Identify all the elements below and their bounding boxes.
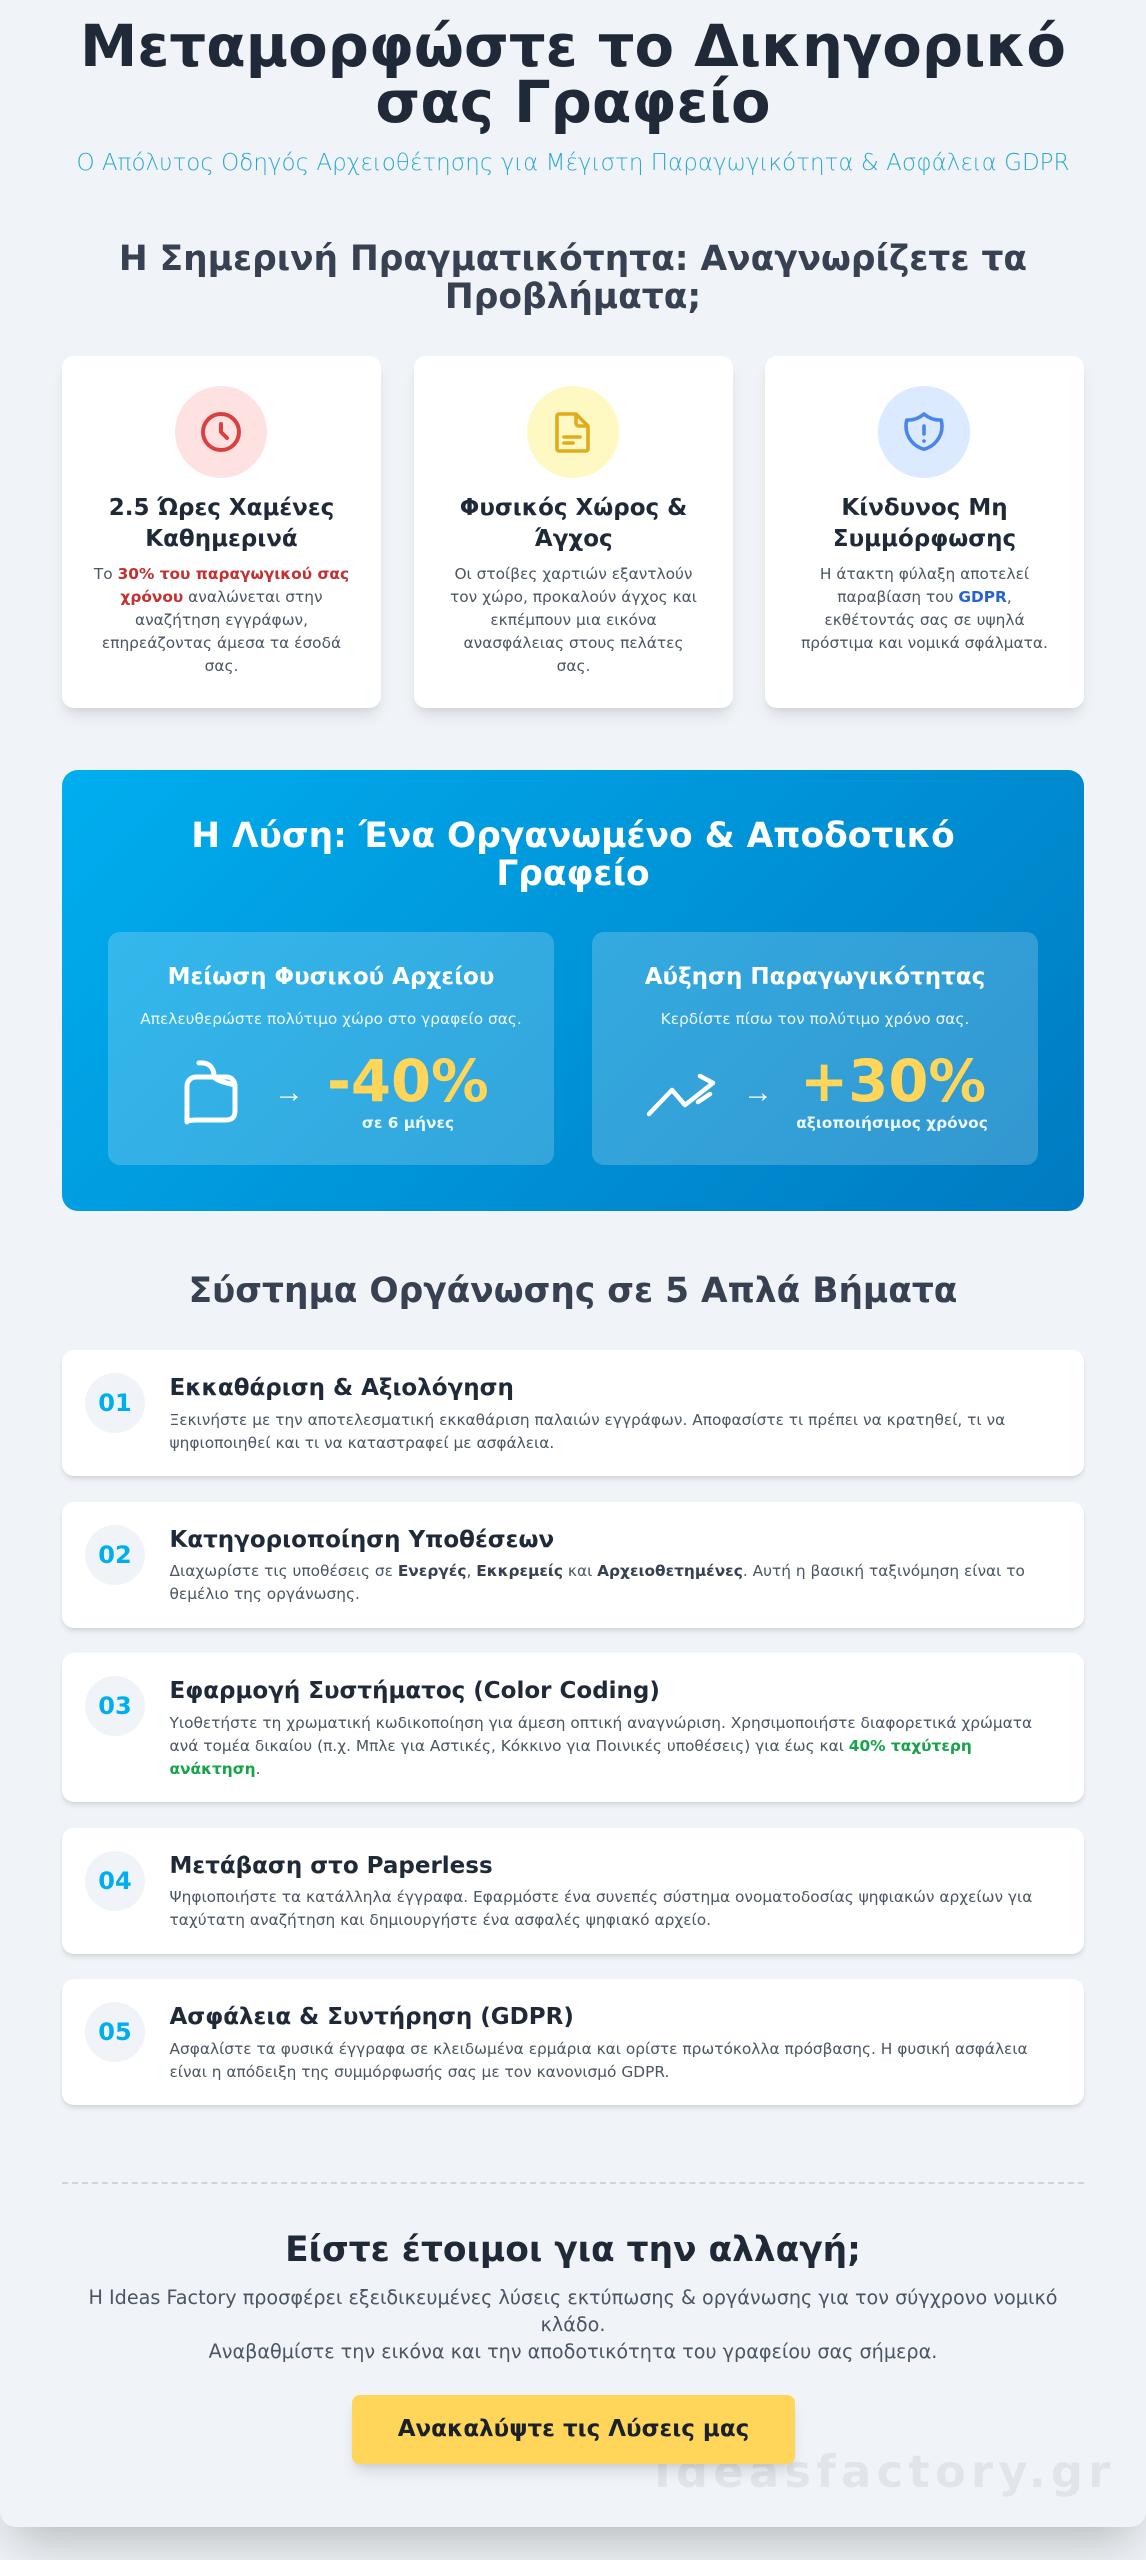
card title: Καθημερινά: [145, 526, 298, 552]
step 5: [62, 1979, 1084, 2105]
card text: σας.: [557, 657, 590, 675]
step number: [85, 1373, 145, 1433]
card text: Το 30% του παραγωγικού σας: [94, 565, 349, 583]
panel: compliance risk: [765, 356, 1084, 708]
step text: [170, 1714, 1032, 1778]
card title: Άγχος: [534, 526, 613, 552]
icon: document: [527, 386, 619, 478]
step 4: [62, 1828, 1084, 1954]
card text: Η άτακτη φύλαξη αποτελεί: [820, 565, 1029, 583]
card title: [460, 494, 687, 552]
step title: Ασφάλεια & Συντήρηση (GDPR): [170, 2004, 574, 2030]
call to action text: Η Ideas Factory προσφέρει εξειδικευμένες λύσεις εκτύπωσης & οργάνωσης για τον σύγχρονο νομικό: [88, 2286, 1058, 2309]
step title: Εκκαθάριση & Αξιολόγηση: [170, 1375, 514, 1401]
card text: Οι στοίβες χαρτιών εξαντλούν: [454, 565, 693, 583]
step text: [170, 1562, 1025, 1603]
step 1: [62, 1350, 1084, 1476]
step text: είναι η απόδειξη της συμμόρφωσής σας με τον κανονισμό GDPR.: [170, 2063, 669, 2081]
step number: 04: [98, 1867, 132, 1895]
stat: +30%: +30%: [800, 1048, 986, 1115]
card text: τον χώρο, προκαλούν άγχος και: [450, 588, 697, 606]
card text: πρόστιμα και νομικά σφάλματα.: [801, 634, 1048, 652]
card text: σας.: [205, 657, 238, 675]
card title: Κίνδυνος Μη: [841, 494, 1008, 520]
panel: physical space: [414, 356, 733, 708]
step title: Εφαρμογή Συστήματος (Color Coding): [170, 1678, 660, 1704]
step text: [170, 1410, 1005, 1452]
step number: 01: [98, 1389, 132, 1417]
step text: Ψηφιοποιήστε τα κατάλληλα έγγραφα. Εφαρμόστε ένα συνεπές σύστημα ονοματοδοσίας ψηφιακών αρχείων για: [170, 1888, 1032, 1906]
step text: [170, 2040, 1028, 2081]
card text: [801, 565, 1048, 652]
heading: problems: Η Σημερινή Πραγματικότητα: Αναγνωρίζετε τα: [119, 239, 1027, 279]
panel title: Μείωση Φυσικού Αρχείου: [168, 964, 494, 990]
step text: θεμέλιο της οργάνωσης.: [170, 1585, 360, 1603]
step text: Υιοθετήστε τη χρωματική κωδικοποίηση για άμεση οπτική αναγνώριση. Χρησιμοποιήστε διαφορετικά χρώματα: [170, 1714, 1032, 1732]
panel text: Κερδίστε πίσω τον πολύτιμο χρόνο σας.: [661, 1010, 969, 1028]
call to action text: [88, 2286, 1058, 2363]
icon: clock: [175, 386, 267, 478]
call to action text: κλάδο.: [541, 2313, 605, 2336]
card text: χρόνου αναλώνεται στην: [120, 588, 323, 606]
stat: -40%: -40%: [327, 1048, 489, 1115]
heading: solution: Η Λύση: Ένα Οργανωμένο & Αποδοτικό: [191, 816, 955, 856]
stat label: σε 6 μήνες: [362, 1114, 454, 1132]
panel: solution: [62, 770, 1084, 1211]
step text: Ασφαλίστε τα φυσικά έγγραφα σε κλειδωμένα ερμάρια και ορίστε πρωτόκολλα πρόσβασης. Η φυσική ασφάλεια: [170, 2040, 1028, 2058]
heading: problems: [119, 239, 1027, 317]
step text: [170, 1888, 1032, 1929]
panel: lost hours: [62, 356, 381, 708]
step number: [85, 2002, 145, 2062]
step number: [85, 1525, 145, 1585]
step text: Ξεκινήστε με την αποτελεσματική εκκαθάριση παλαιών εγγράφων. Αποφασίστε τι πρέπει να κρατηθεί, τι να: [170, 1410, 1005, 1428]
title: [80, 13, 1066, 136]
step number: 03: [98, 1692, 132, 1720]
heading: solution: Γραφείο: [496, 854, 650, 894]
card title: 2.5 Ώρες Χαμένες: [109, 494, 334, 520]
step number: 02: [98, 1541, 132, 1569]
card text: επηρεάζοντας άμεσα τα έσοδά: [102, 634, 341, 652]
panel: archive reduction: [108, 932, 554, 1165]
watermark: Ideasfactory.gr: [654, 2445, 1116, 2498]
step text: Διαχωρίστε τις υποθέσεις σε Ενεργές, Εκκρεμείς και Αρχειοθετημένες. Αυτή η βασική ταξινόμηση είναι το: [170, 1562, 1025, 1580]
step title: Κατηγοριοποίηση Υποθέσεων: [170, 1527, 554, 1553]
step number: [85, 1676, 145, 1736]
card text: [450, 565, 697, 675]
card text: παραβίαση του GDPR,: [837, 588, 1012, 606]
subtitle: Ο Απόλυτος Οδηγός Αρχειοθέτησης για Μέγιστη Παραγωγικότητα & Ασφάλεια GDPR: [76, 150, 1070, 176]
heading: problems: Προβλήματα;: [445, 277, 701, 317]
step text: ανά τομέα δικαίου (π.χ. Μπλε για Αστικές, Κόκκινο για Ποινικές υποθέσεις) για έως και 40% ταχύτερη: [170, 1737, 972, 1755]
arrow: →: [743, 1076, 773, 1109]
icon: shield: [878, 386, 970, 478]
panel: productivity: [592, 932, 1038, 1165]
arrow: →: [274, 1076, 304, 1109]
step text: ανάκτηση.: [170, 1760, 261, 1778]
panel title: Αύξηση Παραγωγικότητας: [645, 964, 985, 990]
panel text: Απελευθερώστε πολύτιμο χώρο στο γραφείο σας.: [140, 1010, 522, 1028]
call to action text: Αναβαθμίστε την εικόνα και την αποδοτικότητα του γραφείου σας σήμερα.: [209, 2340, 937, 2363]
heading: call to action: Είστε έτοιμοι για την αλλαγή;: [285, 2230, 861, 2270]
card text: εκθέτοντάς σας σε υψηλά: [824, 611, 1025, 629]
card text: ανασφάλειας στους πελάτες: [464, 634, 683, 652]
card text: [94, 565, 349, 675]
card text: εκπέμπουν μια εικόνα: [490, 611, 657, 629]
step title: Μετάβαση στο Paperless: [170, 1853, 493, 1879]
step text: ψηφιοποιηθεί και τι να καταστραφεί με ασφάλεια.: [170, 1434, 554, 1452]
title: σας Γραφείο: [375, 69, 771, 136]
step 3: [62, 1653, 1084, 1802]
icon: archive box: [184, 1060, 238, 1124]
card title: [109, 494, 334, 552]
card title: Συμμόρφωσης: [833, 526, 1016, 552]
card text: αναζήτηση εγγράφων,: [135, 611, 308, 629]
step 2: [62, 1502, 1084, 1628]
step number: [85, 1851, 145, 1911]
stat label: αξιοποιήσιμος χρόνος: [796, 1114, 988, 1132]
heading: solution: [191, 816, 955, 894]
step number: 05: [98, 2018, 132, 2046]
button: [352, 2395, 795, 2464]
card title: Φυσικός Χώρος &: [460, 494, 687, 520]
title: Μεταμορφώστε το Δικηγορικό: [80, 13, 1066, 80]
heading: steps: Σύστημα Οργάνωσης σε 5 Απλά Βήματα: [189, 1271, 957, 1311]
button: Ανακαλύψτε τις Λύσεις μας: [398, 2416, 749, 2442]
icon: trend up: [646, 1074, 716, 1116]
step text: ταχύτατη αναζήτηση και δημιουργήστε ένα ασφαλές ψηφιακό αρχείο.: [170, 1911, 711, 1929]
card title: [833, 494, 1016, 552]
